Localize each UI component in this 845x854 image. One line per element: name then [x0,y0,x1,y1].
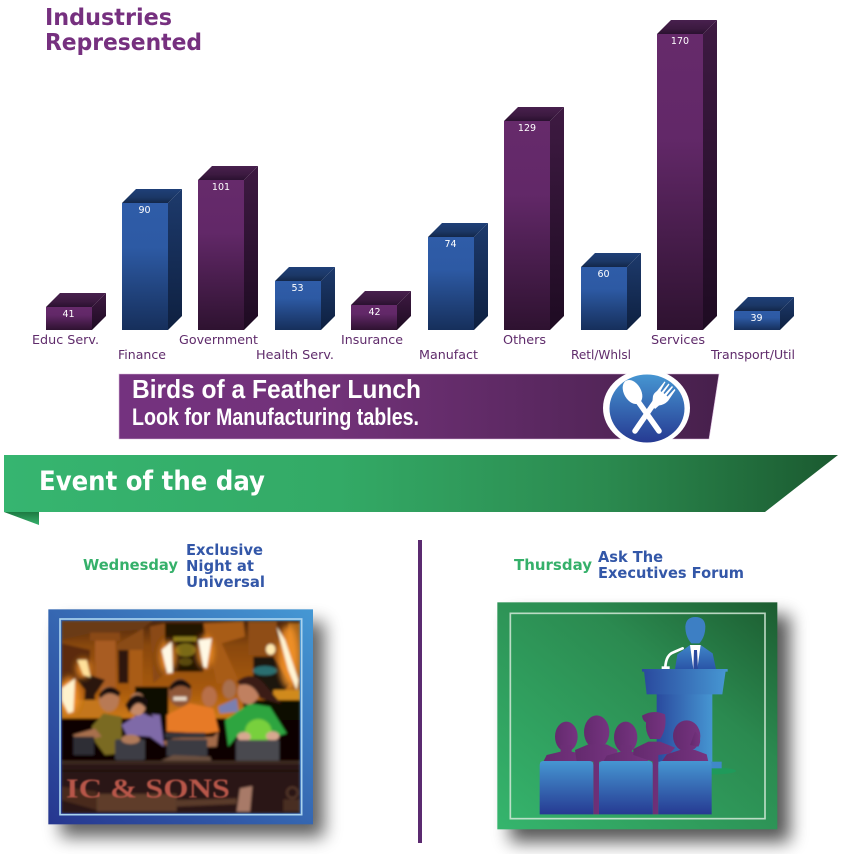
bar: Retl/Whlsl 60 [581,253,641,330]
heading: Wednesday [83,541,265,591]
bar: Educ Serv. 41 [46,293,106,330]
bar: Health Serv. 53 [275,267,335,330]
category labels [32,332,795,362]
title: Industries Represented: Industries [45,5,172,31]
banner text: Birds of a Feather Lunch [132,374,421,404]
heading: Wednesday: Exclusive [186,541,263,559]
category labels: Retl/Whlsl [571,347,631,362]
bar: Health Serv. 53: 53 [291,283,304,294]
category labels: Manufact [419,347,478,362]
title: Industries Represented [45,5,202,56]
heading: Wednesday: Night at [186,557,255,575]
illustration: speaker at podium with audience [497,602,790,842]
bar: Services 170 [657,20,717,330]
bar: Government 101 [198,166,258,330]
bar: Educ Serv. 41: 41 [62,309,75,320]
bar: Retl/Whlsl 60: 60 [597,269,610,280]
category labels: Educ Serv. [32,332,99,347]
heading text: Event of the day [39,466,265,497]
audience [543,712,708,814]
title: Industries Represented: Represented [45,30,202,56]
speaker [662,617,716,669]
bar: Transport/Util 39 [734,297,794,330]
photo: roller coaster riders: IC & SONS [66,773,230,803]
icon: crossed spoon and fork [603,370,690,446]
bar chart: industries [32,20,795,362]
podium [642,669,736,774]
bar: Finance 90 [122,189,182,330]
category labels: Health Serv. [256,347,334,362]
bar: Services 170: 170 [671,36,689,47]
bar: Others 129: 129 [518,123,536,134]
bar: Others 129 [504,107,564,330]
heading: Thursday: Thursday [514,556,592,574]
category labels: Insurance [341,332,403,347]
category labels: Transport/Util [710,347,795,362]
bar: Manufact 74 [428,223,488,330]
bar: Government 101: 101 [212,182,230,193]
category labels: Services [651,332,705,347]
heading: Wednesday: Universal [186,573,265,591]
category labels: Others [503,332,546,347]
banner text: Look for Manufacturing tables. [132,404,419,431]
heading: Thursday: Executives Forum [598,564,744,582]
banner: Birds of a Feather Lunch [119,370,719,446]
heading: Wednesday: Wednesday [83,556,178,574]
bar: Transport/Util 39: 39 [750,313,763,324]
seats [540,761,712,814]
bar: Insurance 42 [351,291,411,330]
category labels: Government [179,332,258,347]
divider [418,540,422,843]
banner: Event of the day [4,455,838,525]
photo: roller coaster riders [48,609,324,837]
bar: Manufact 74: 74 [444,239,457,250]
heading: Thursday [514,548,744,582]
heading: Thursday: Ask The [598,548,663,566]
category labels: Finance [118,347,166,362]
banner text [132,374,421,431]
bar: Finance 90: 90 [138,205,151,216]
bar: Insurance 42: 42 [368,307,381,318]
